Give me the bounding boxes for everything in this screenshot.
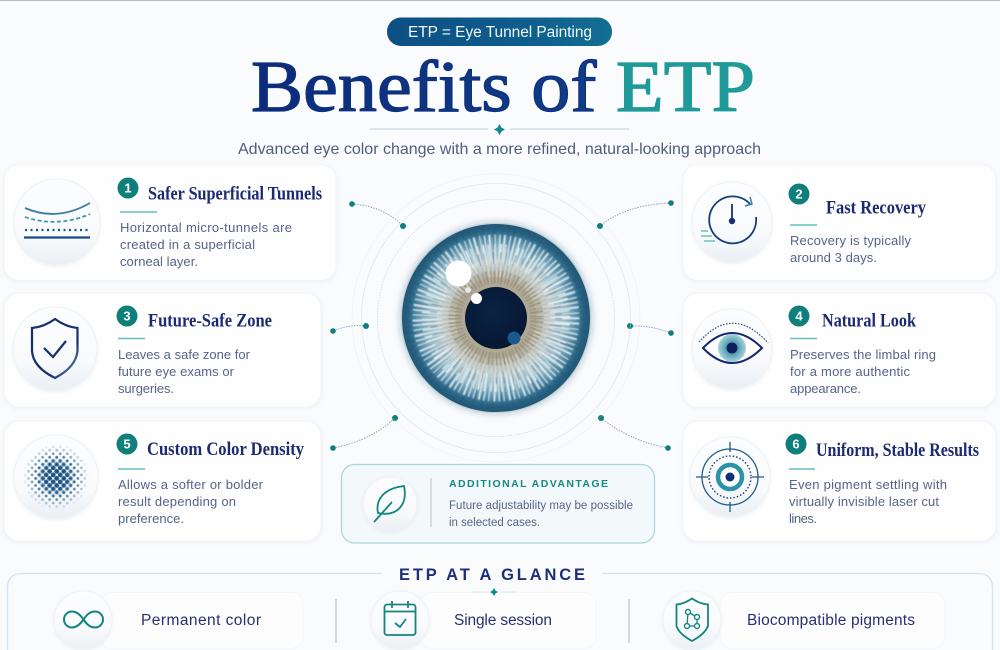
panel: natural look bbox=[683, 293, 996, 407]
badge 3 bbox=[116, 306, 138, 326]
description: surgeries. bbox=[118, 381, 174, 396]
badge 4: 4 bbox=[795, 308, 803, 324]
description: virtually invisible laser cut bbox=[789, 494, 939, 509]
description: Recovery is typically bbox=[790, 233, 912, 248]
description: Horizontal micro-tunnels are bbox=[120, 220, 292, 235]
badge 1 bbox=[118, 178, 138, 198]
heading: Custom Color Density bbox=[147, 440, 305, 460]
badge 3: 3 bbox=[123, 308, 131, 324]
subtitle: Advanced eye color change with a more refined, natural-looking approach bbox=[238, 141, 761, 158]
panel: fast recovery bbox=[683, 164, 996, 280]
heading: Natural Look bbox=[822, 312, 917, 332]
section heading: ETP AT A GLANCE bbox=[399, 566, 585, 584]
description: around 3 days. bbox=[790, 250, 877, 265]
item: permanent color bbox=[54, 591, 303, 649]
label: Biocompatible pigments bbox=[747, 612, 915, 629]
badge 2 bbox=[788, 184, 810, 204]
description bbox=[118, 347, 251, 396]
icon: corneal tunnels bbox=[14, 179, 100, 265]
description: corneal layer. bbox=[120, 254, 198, 269]
heading: Safer Superficial Tunnels bbox=[148, 184, 322, 204]
title divider bbox=[370, 124, 629, 135]
title: Benefits of ETP bbox=[251, 46, 755, 127]
callout text: Future adjustability may be possible bbox=[449, 500, 633, 512]
connector lines bbox=[330, 200, 674, 451]
panel: safer superficial tunnels bbox=[4, 164, 336, 280]
description bbox=[118, 477, 264, 526]
label: Permanent color bbox=[141, 612, 261, 629]
eye illustration bbox=[352, 174, 640, 462]
description: future eye exams or bbox=[118, 364, 235, 379]
description: lines. bbox=[789, 511, 817, 526]
description: preference. bbox=[118, 511, 184, 526]
callout text bbox=[449, 500, 633, 529]
description: result depending on bbox=[118, 494, 236, 509]
heading: Uniform, Stable Results bbox=[816, 441, 979, 461]
description: appearance. bbox=[790, 381, 861, 396]
badge 4 bbox=[788, 306, 810, 326]
badge 2: 2 bbox=[795, 186, 803, 202]
description bbox=[790, 347, 936, 396]
icon: calendar bbox=[371, 591, 429, 649]
description bbox=[790, 233, 912, 265]
panel: custom color density bbox=[14, 434, 322, 542]
description: Even pigment settling with bbox=[789, 477, 947, 492]
panel: uniform, stable results bbox=[683, 421, 996, 541]
header badge: ETP = Eye Tunnel Painting bbox=[408, 24, 592, 41]
icon: molecule shield bbox=[663, 591, 721, 649]
icon: leaf bbox=[363, 477, 417, 531]
item: biocompatible pigments bbox=[663, 591, 945, 649]
header badge bbox=[387, 18, 612, 46]
badge 6: 6 bbox=[792, 436, 800, 452]
badge 6 bbox=[786, 434, 806, 454]
panel: ETP at a glance bbox=[8, 566, 992, 650]
heading ornament bbox=[472, 588, 516, 596]
description: Preserves the limbal ring bbox=[790, 347, 936, 362]
icon: shield bbox=[13, 307, 97, 391]
description: created in a superficial bbox=[120, 237, 255, 252]
callout text: in selected cases. bbox=[449, 517, 540, 529]
description bbox=[789, 477, 947, 526]
icon: clock bbox=[692, 182, 772, 262]
callout heading: ADDITIONAL ADVANTAGE bbox=[449, 478, 608, 490]
heading: Future-Safe Zone bbox=[148, 312, 272, 332]
heading: Fast Recovery bbox=[826, 198, 927, 218]
callout: additional advantage bbox=[342, 464, 654, 543]
badge 1: 1 bbox=[124, 180, 132, 196]
panel: future-safe zone bbox=[4, 293, 321, 407]
icon: halftone dots bbox=[14, 435, 98, 519]
icon: eye bbox=[692, 309, 772, 389]
description: Allows a softer or bolder bbox=[118, 477, 264, 492]
icon: target bbox=[690, 437, 770, 517]
description bbox=[120, 220, 292, 269]
badge 5 bbox=[116, 434, 138, 454]
label: Single session bbox=[454, 612, 552, 629]
badge 5: 5 bbox=[123, 436, 131, 452]
icon: infinity bbox=[54, 591, 112, 649]
item: single session bbox=[371, 591, 596, 649]
description: for a more authentic bbox=[790, 364, 910, 379]
description: Leaves a safe zone for bbox=[118, 347, 251, 362]
